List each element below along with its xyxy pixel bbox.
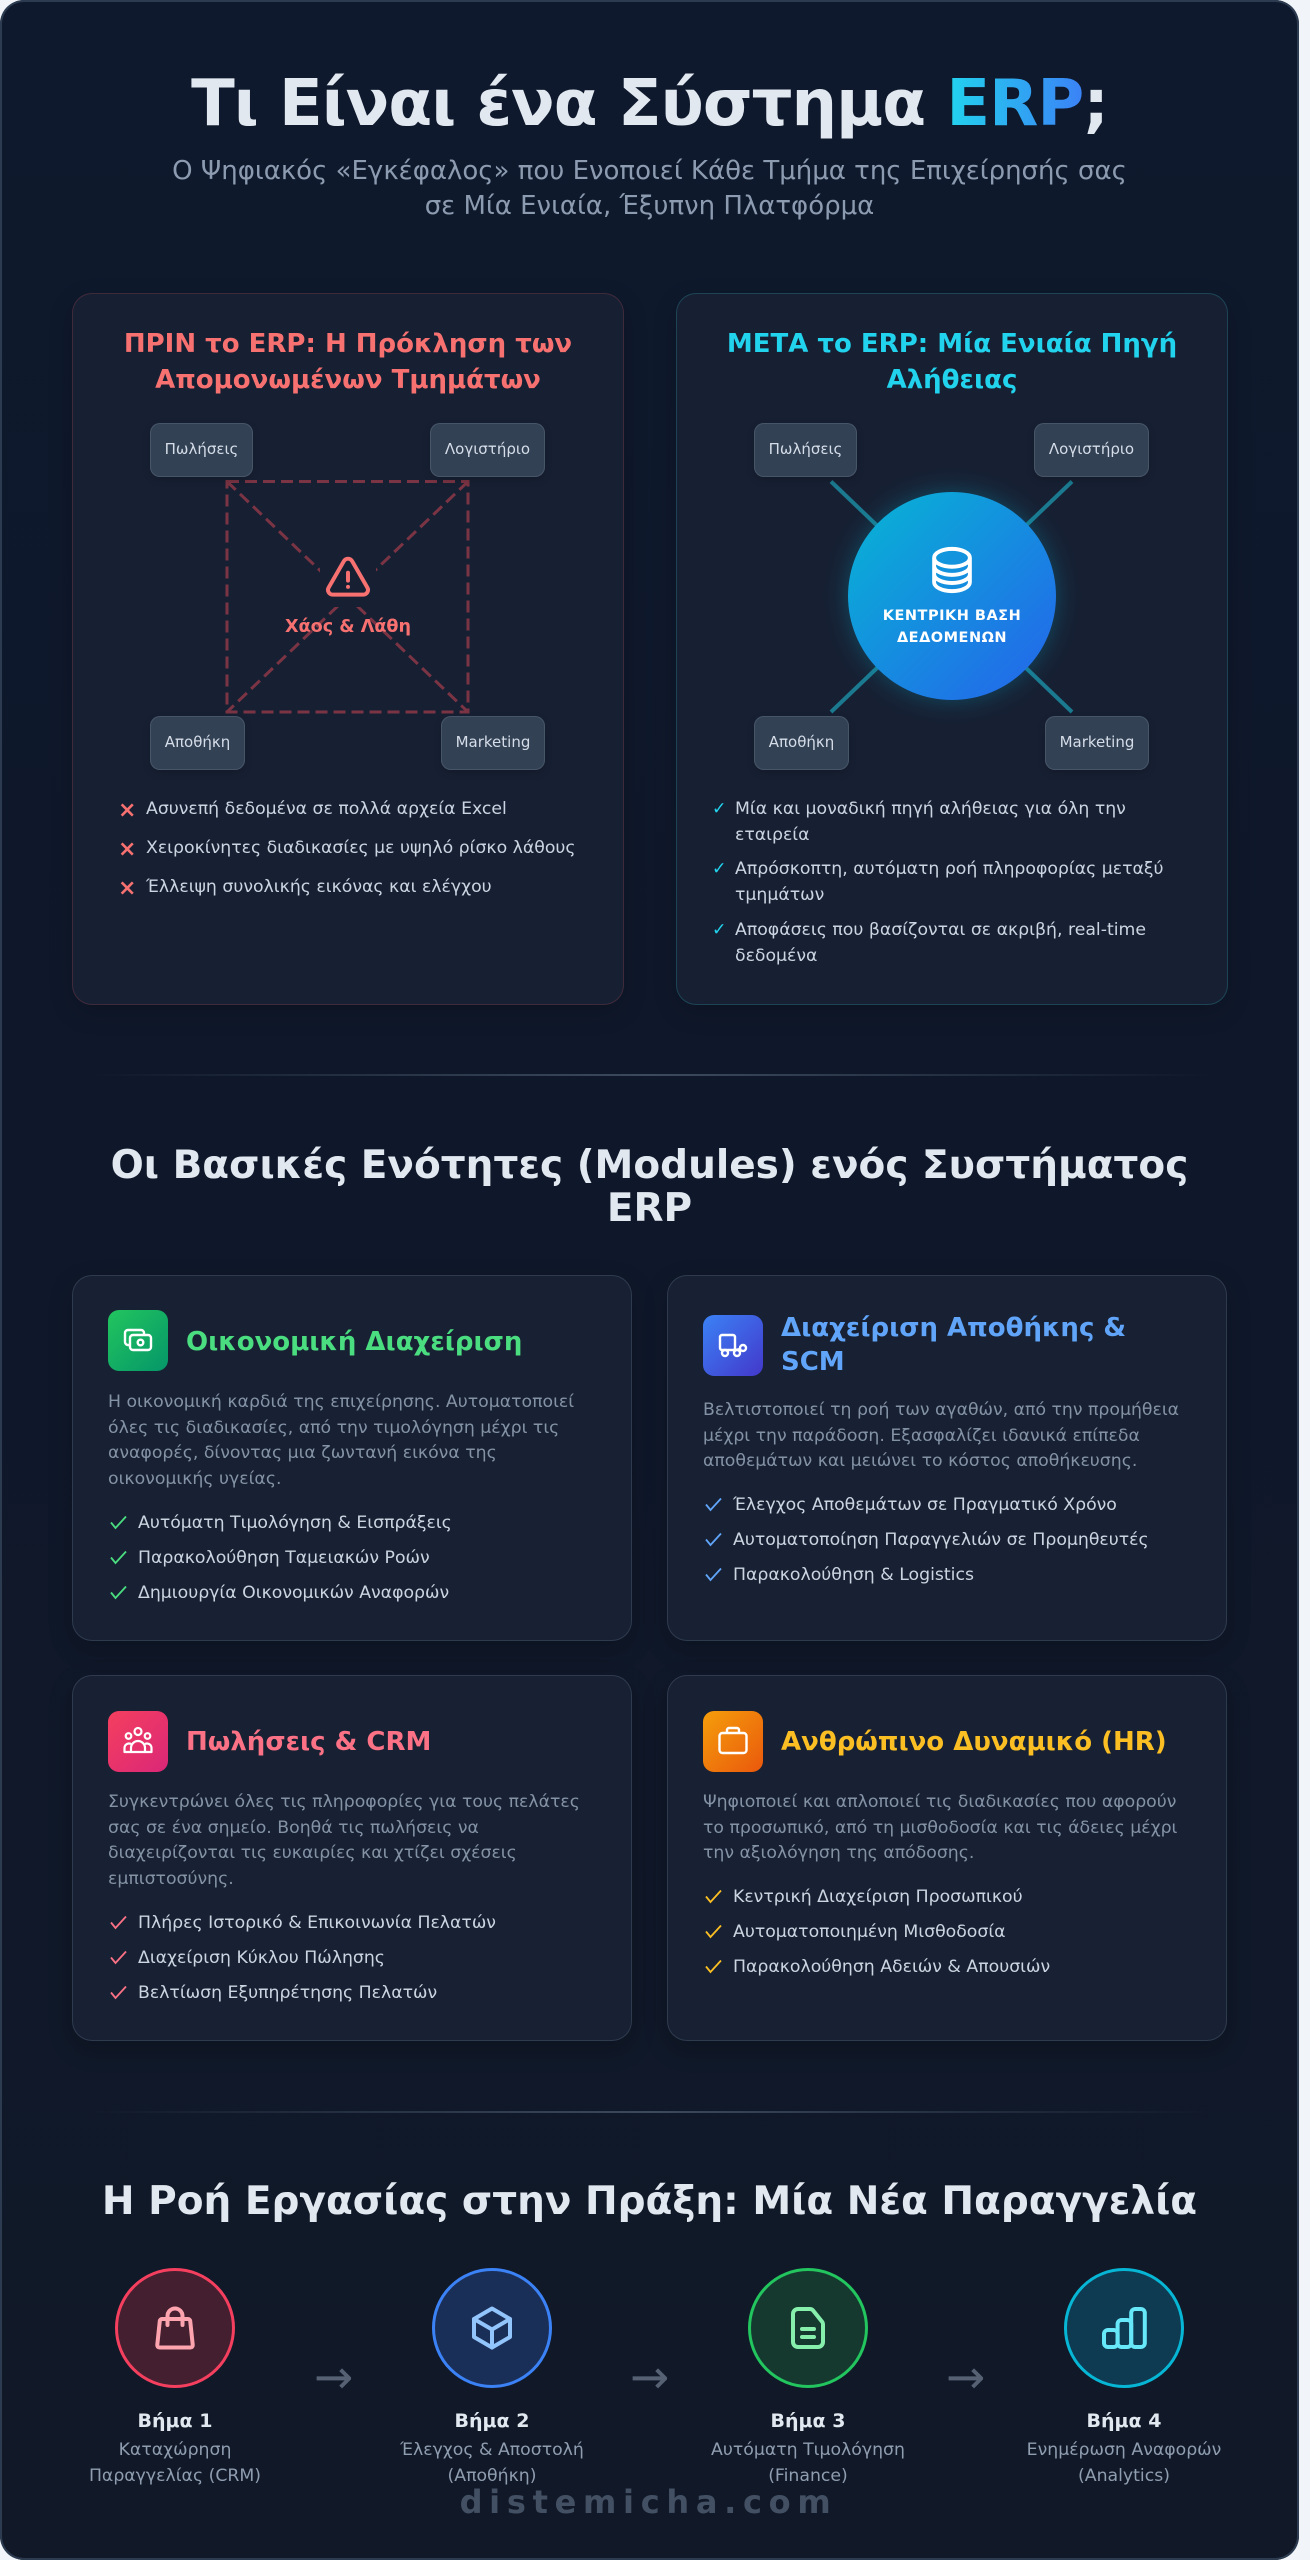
department box: accounting	[430, 423, 545, 477]
department box: sales: Πωλήσεις	[165, 440, 238, 458]
section heading: workflow: Η Ροή Εργασίας στην Πράξη: Μία Νέα Παραγγελία	[102, 2179, 1197, 2224]
arrow: →	[314, 2350, 353, 2405]
icon: briefcase	[703, 1711, 763, 1772]
step 1	[89, 2268, 261, 2486]
subtitle: Ο Ψηφιακός «Εγκέφαλος» που Ενοποιεί Κάθε Τμήμα της Επιχείρησής σας	[172, 156, 1127, 186]
arrow: →	[630, 2350, 669, 2405]
feature list	[705, 1495, 1149, 1585]
problem list: Χειροκίνητες διαδικασίες με υψηλό ρίσκο λάθους	[146, 838, 576, 858]
benefit list: εταιρεία	[735, 825, 810, 845]
panel heading: after	[727, 329, 1177, 394]
step description: Αυτόματη Τιμολόγηση	[711, 2440, 905, 2460]
step description	[678, 2437, 938, 2489]
step 2	[362, 2268, 622, 2490]
central database circle	[848, 492, 1056, 700]
step title: Βήμα 2	[455, 2410, 529, 2432]
step description	[994, 2437, 1254, 2489]
department box: marketing	[1045, 716, 1149, 770]
step description: Παραγγελίας (CRM)	[89, 2466, 261, 2486]
circle label	[883, 608, 1021, 646]
feature 1: Έλεγχος Αποθεμάτων σε Πραγματικό Χρόνο	[733, 1495, 1117, 1515]
step 3	[678, 2268, 938, 2490]
department box: sales: Πωλήσεις	[769, 440, 842, 458]
panel heading: before: ΠΡΙΝ το ERP: Η Πρόκληση των	[124, 329, 572, 359]
card description: αναφορές, δίνοντας μια ζωντανή εικόνα της	[108, 1443, 497, 1463]
card description: όλες τις διαδικασίες, από την τιμολόγηση μέχρι τις	[108, 1418, 559, 1438]
problem list: ×	[118, 798, 136, 823]
card description: εμπιστοσύνης.	[108, 1869, 234, 1889]
benefit list: Αποφάσεις που βασίζονται σε ακριβή, real-time	[735, 920, 1146, 940]
benefit list: ✓	[712, 859, 726, 879]
section heading: modules: Οι Βασικές Ενότητες (Modules) ενός Συστήματος	[111, 1143, 1188, 1188]
problem list: ×	[118, 837, 136, 862]
card description: Συγκεντρώνει όλες τις πληροφορίες για τους πελάτες	[108, 1792, 580, 1812]
benefit item 3	[712, 920, 1146, 966]
arrow: →	[946, 2350, 985, 2405]
step title: Βήμα 4	[1087, 2410, 1161, 2432]
benefit list: δεδομένα	[735, 946, 817, 966]
department box: marketing: Marketing	[456, 733, 530, 751]
problem list: ×	[118, 876, 136, 901]
card title: Διαχείριση Αποθήκης &	[781, 1313, 1126, 1343]
feature 3: Δημιουργία Οικονομικών Αναφορών	[138, 1583, 449, 1603]
section heading: modules: ERP	[607, 1186, 692, 1230]
department box: marketing	[441, 716, 545, 770]
step description: (Αποθήκη)	[448, 2466, 536, 2486]
card: human resources	[667, 1675, 1227, 2041]
icon: users	[108, 1711, 168, 1772]
department box: warehouse	[150, 716, 245, 770]
step description: (Finance)	[768, 2466, 848, 2486]
benefit item 1	[712, 799, 1126, 845]
step title: Βήμα 1	[138, 2410, 212, 2432]
department box: sales	[150, 423, 253, 477]
department box: accounting: Λογιστήριο	[1049, 440, 1134, 458]
benefit list: τμημάτων	[735, 885, 824, 905]
card description: οικονομικής υγείας.	[108, 1469, 281, 1489]
icon: document	[748, 2268, 868, 2388]
feature list	[110, 1913, 496, 2003]
feature 2: Αυτοματοποίηση Παραγγελιών σε Προμηθευτές	[733, 1530, 1149, 1550]
benefit list	[712, 799, 1164, 966]
icon: truck	[703, 1315, 763, 1376]
step description: Ενημέρωση Αναφορών	[1027, 2440, 1221, 2460]
benefit list: Μία και μοναδική πηγή αλήθειας για όλη την	[735, 799, 1126, 819]
card description	[703, 1400, 1179, 1471]
chaos label: Χάος & Λάθη	[285, 617, 411, 637]
benefit list: ✓	[712, 799, 726, 819]
panel: after ERP	[676, 293, 1228, 1005]
subtitle: σε Μία Ενιαία, Έξυπνη Πλατφόρμα	[425, 191, 874, 221]
card description: αποθεμάτων και μειώνει το κόστος αποθήκευσης.	[703, 1451, 1137, 1471]
chaos diagram lines	[226, 480, 470, 714]
card title: Οικονομική Διαχείριση	[186, 1327, 522, 1357]
feature 3: Παρακολούθηση & Logistics	[733, 1565, 974, 1585]
icon: cube	[432, 2268, 552, 2388]
section heading: modules	[111, 1143, 1188, 1230]
feature list	[110, 1513, 452, 1603]
card description: διαχειρίζονται τις ευκαιρίες και χτίζει σχέσεις	[108, 1843, 517, 1863]
card: finance	[72, 1275, 632, 1641]
step 4	[994, 2268, 1254, 2490]
card description: Ψηφιοποιεί και απλοποιεί τις διαδικασίες που αφορούν	[703, 1792, 1176, 1812]
card description: Βελτιστοποιεί τη ροή των αγαθών, από την προμήθεια	[703, 1400, 1179, 1420]
icon: warning	[320, 551, 376, 607]
card title: Πωλήσεις & CRM	[186, 1727, 431, 1757]
card description: σας σε ένα σημείο. Βοηθά τις πωλήσεις να	[108, 1818, 479, 1838]
problem list	[118, 798, 576, 901]
step description	[362, 2437, 622, 2489]
icon: bar chart	[1064, 2268, 1184, 2388]
icon: database	[932, 546, 972, 594]
circle label: ΔΕΔΟΜΕΝΩΝ	[897, 630, 1007, 646]
card description: το προσωπικό, από τη μισθοδοσία και τις άδειες μέχρι	[703, 1818, 1177, 1838]
problem item 2	[118, 837, 576, 862]
card description: Η οικονομική καρδιά της επιχείρησης. Αυτοματοποιεί	[108, 1392, 574, 1412]
feature 2: Αυτοματοποιημένη Μισθοδοσία	[733, 1922, 1006, 1942]
feature 3: Παρακολούθηση Αδειών & Απουσιών	[733, 1957, 1050, 1977]
department box: marketing: Marketing	[1060, 733, 1134, 751]
step title: Βήμα 3	[771, 2410, 845, 2432]
card description	[108, 1792, 580, 1889]
circle label: ΚΕΝΤΡΙΚΗ ΒΑΣΗ	[883, 608, 1021, 624]
feature 1: Κεντρική Διαχείριση Προσωπικού	[733, 1887, 1023, 1907]
step description: (Analytics)	[1078, 2466, 1170, 2486]
feature 2: Διαχείριση Κύκλου Πώλησης	[138, 1948, 385, 1968]
card description	[703, 1792, 1177, 1863]
panel heading: after: Αλήθειας	[887, 364, 1017, 394]
feature 2: Παρακολούθηση Ταμειακών Ροών	[138, 1548, 430, 1568]
step description: Καταχώρηση	[119, 2440, 231, 2460]
title: Τι Είναι ένα Σύστημα ERP;	[191, 67, 1108, 141]
card: warehouse and SCM	[667, 1275, 1227, 1641]
feature list	[705, 1887, 1050, 1977]
department box: warehouse	[754, 716, 849, 770]
feature 3: Βελτίωση Εξυπηρέτησης Πελατών	[138, 1983, 437, 2003]
watermark: distemicha.com	[460, 2483, 837, 2521]
department box: sales	[754, 423, 857, 477]
connector lines	[830, 480, 1074, 714]
problem list: Έλλειψη συνολικής εικόνας και ελέγχου	[146, 877, 492, 897]
benefit item 2	[712, 859, 1164, 905]
card description: την αξιολόγηση της απόδοσης.	[703, 1843, 974, 1863]
card: sales and CRM	[72, 1675, 632, 2041]
benefit list: Απρόσκοπτη, αυτόματη ροή πληροφορίας μεταξύ	[735, 859, 1164, 879]
panel heading: before	[124, 329, 572, 394]
feature 1: Αυτόματη Τιμολόγηση & Εισπράξεις	[138, 1513, 452, 1533]
card description	[108, 1392, 574, 1489]
step description: Έλεγχος & Αποστολή	[400, 2440, 584, 2460]
problem item 3	[118, 876, 492, 901]
department box: accounting	[1034, 423, 1149, 477]
department box: warehouse: Αποθήκη	[769, 733, 834, 751]
benefit list: ✓	[712, 920, 726, 940]
icon: money	[108, 1310, 168, 1371]
problem list: Ασυνεπή δεδομένα σε πολλά αρχεία Excel	[146, 799, 507, 819]
panel: before ERP	[72, 293, 624, 1005]
panel heading: after: ΜΕΤΑ το ERP: Μία Ενιαία Πηγή	[727, 329, 1177, 359]
panel heading: before: Απομονωμένων Τμημάτων	[155, 364, 541, 394]
card description: μέχρι την παράδοση. Εξασφαλίζει ιδανικά επίπεδα	[703, 1426, 1140, 1446]
icon: shopping bag	[115, 2268, 235, 2388]
subtitle	[172, 156, 1127, 221]
department box: accounting: Λογιστήριο	[445, 440, 530, 458]
problem item 1	[118, 798, 507, 823]
card title: Ανθρώπινο Δυναμικό (HR)	[781, 1727, 1167, 1757]
card title: SCM	[781, 1347, 845, 1377]
feature 1: Πλήρες Ιστορικό & Επικοινωνία Πελατών	[138, 1913, 496, 1933]
step description	[89, 2440, 261, 2486]
card title	[781, 1313, 1126, 1377]
department box: warehouse: Αποθήκη	[165, 733, 230, 751]
